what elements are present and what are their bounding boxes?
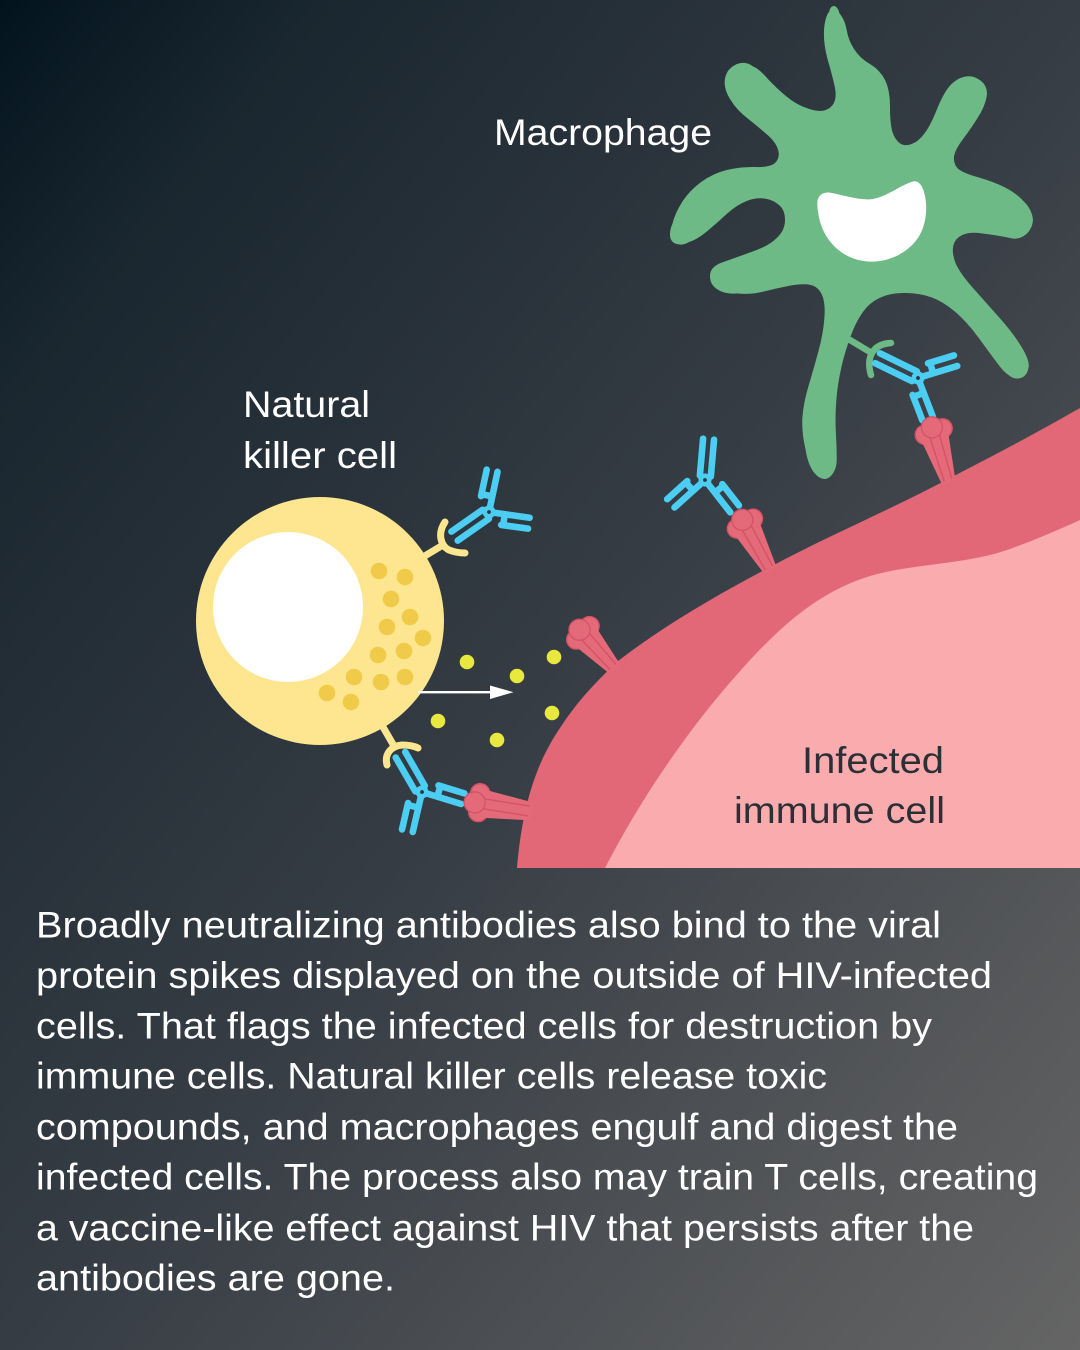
body text: compounds, and macrophages engulf and digest the (36, 1106, 958, 1148)
cell membrane (517, 408, 1080, 868)
body text: infected cells. The process also may train T cells, creating (36, 1156, 1038, 1198)
infected immune cell (517, 408, 1080, 868)
body text: Broadly neutralizing antibodies also bind to the viral (36, 904, 941, 946)
macrophage receptor (850, 340, 891, 375)
macrophage body (670, 6, 1033, 479)
viral spike: macrophage side (911, 412, 968, 488)
macrophage (670, 6, 1033, 479)
natural killer cell (196, 497, 465, 765)
toxic granules (319, 563, 431, 710)
label: infected immune cell (734, 740, 945, 831)
body text (36, 904, 1038, 1298)
viral spike: free (559, 609, 629, 682)
label: infected immune cell: Infected (802, 740, 944, 781)
body text: immune cells. Natural killer cells release toxic (36, 1056, 827, 1096)
viral spike: middle (721, 501, 788, 580)
antibody: killer cell upper (434, 465, 534, 566)
label: natural killer cell: killer cell (243, 435, 397, 476)
label: natural killer cell: Natural (243, 384, 370, 425)
label: infected immune cell: immune cell (734, 790, 945, 831)
killer cell receptors (383, 522, 465, 765)
arrow: toxic compounds release (418, 686, 514, 699)
viral spike: killer cell side (461, 781, 535, 830)
label: natural killer cell (243, 384, 397, 476)
killer cell body (196, 497, 444, 745)
antibody: killer cell lower (369, 737, 468, 836)
label: macrophage: Macrophage (494, 112, 712, 153)
antibody: macrophage bound (862, 326, 961, 424)
macrophage nucleus (817, 181, 926, 262)
body text: protein spikes displayed on the outside of HIV-infected (36, 955, 992, 996)
released toxic compounds (431, 650, 561, 747)
body text: antibodies are gone. (36, 1258, 395, 1298)
antibody: unbound to effector (667, 436, 744, 513)
body text: a vaccine-like effect against HIV that persists after the (36, 1208, 974, 1248)
cell interior (605, 520, 1080, 868)
body text: cells. That flags the infected cells for destruction by (36, 1006, 933, 1046)
killer cell nucleus (213, 532, 363, 682)
